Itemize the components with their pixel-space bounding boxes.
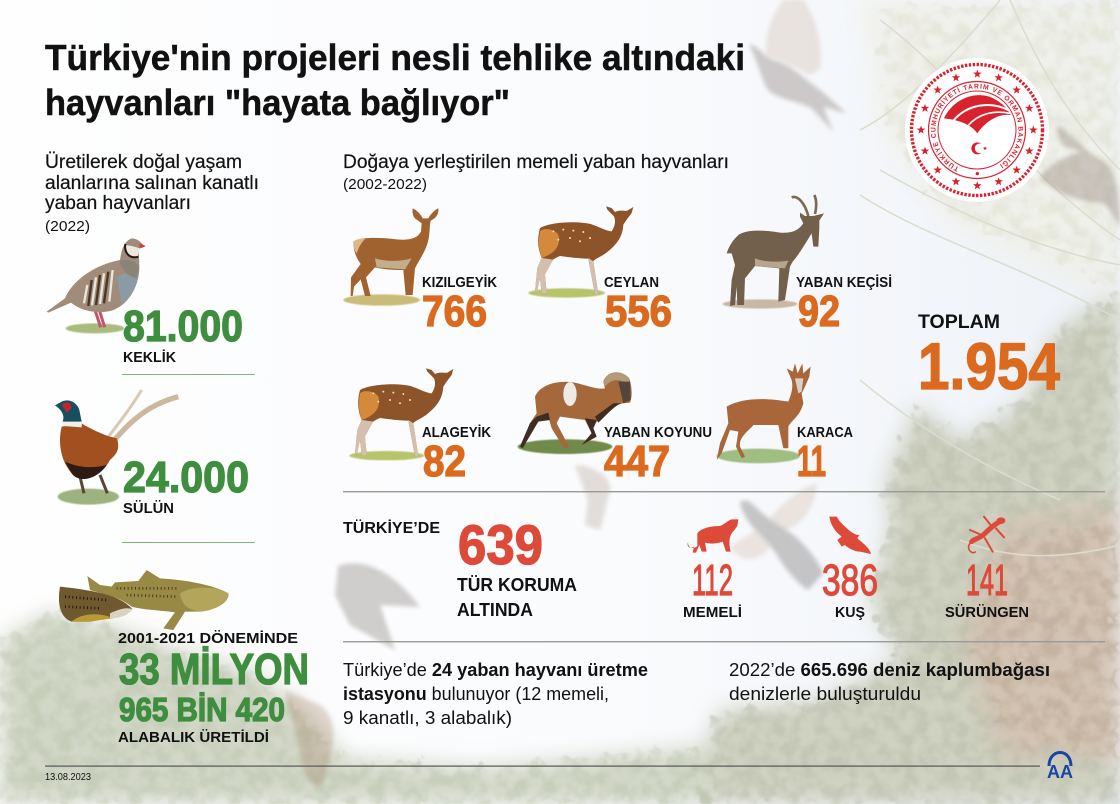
icon: lizard bbox=[969, 517, 1005, 553]
icon: wild goat bbox=[723, 195, 824, 309]
right heading: released mammals: Doğaya yerleştirilen memeli yaban hayvanları bbox=[343, 152, 729, 173]
number: 447 bbox=[604, 437, 670, 486]
number: 1.954 bbox=[918, 329, 1060, 403]
label: YABAN KOYUNU bbox=[604, 424, 712, 441]
label: KEKLİK bbox=[123, 349, 176, 366]
icon: fallow deer bbox=[349, 368, 453, 460]
panel: total bbox=[918, 311, 1060, 403]
number: 11 bbox=[797, 437, 826, 486]
number: 639 bbox=[458, 513, 543, 576]
flying birds (faint) bbox=[285, 0, 1120, 790]
left heading: released winged animals: Üretilerek doğal yaşam bbox=[45, 152, 242, 173]
ministry emblem bbox=[905, 58, 1049, 202]
text block: breeding stations bbox=[343, 659, 648, 728]
icon: pheasant bbox=[55, 390, 178, 505]
label: CEYLAN bbox=[604, 274, 659, 291]
left heading: released winged animals: (2022) bbox=[45, 218, 90, 235]
ministry emblem: TÜRKİYE CUMHURİYETİ TARIM VE ORMAN BAKANLIĞI bbox=[930, 84, 1024, 172]
number: 92 bbox=[798, 287, 840, 336]
panel: birds bbox=[822, 517, 878, 621]
label: KUŞ bbox=[835, 604, 865, 621]
label: KIZILGEYİK bbox=[422, 274, 497, 291]
icon: red deer bbox=[343, 208, 438, 306]
panel: mouflon bbox=[518, 372, 712, 486]
panel: fallow deer bbox=[349, 368, 491, 486]
label: YABAN KEÇİSİ bbox=[796, 274, 892, 291]
number: 386 bbox=[822, 556, 878, 605]
panel: protected species: ALTINDA bbox=[457, 600, 533, 620]
panel: roe deer bbox=[717, 363, 853, 486]
panel: mammals bbox=[683, 519, 742, 621]
label: TOPLAM bbox=[918, 311, 1000, 333]
panel: red deer bbox=[343, 208, 497, 336]
label: KARACA bbox=[797, 424, 853, 441]
label: ALAGEYİK bbox=[422, 424, 491, 441]
icon: partridge bbox=[47, 238, 146, 333]
right heading: released mammals: (2002-2022) bbox=[343, 176, 427, 193]
label: MEMELİ bbox=[683, 604, 742, 621]
right heading: released mammals bbox=[343, 152, 729, 193]
panel: wild goat bbox=[723, 195, 892, 336]
text block: sea turtles: 2022’de 665.696 deniz kaplumbağası bbox=[729, 659, 1050, 680]
panel: protected species bbox=[343, 513, 577, 620]
icon: panther bbox=[688, 519, 738, 553]
number: 141 bbox=[966, 556, 1008, 605]
title: hayvanları "hayata bağlıyor" bbox=[45, 82, 510, 123]
number: 766 bbox=[422, 287, 487, 336]
number: 24.000 bbox=[123, 453, 249, 502]
number: 965 thousand 420: 965 BİN 420 bbox=[119, 691, 285, 728]
label: TÜRKİYE’DE bbox=[343, 520, 440, 537]
panel: gazelle bbox=[528, 206, 672, 336]
left heading: released winged animals bbox=[45, 152, 259, 235]
footer rule and date: 13.08.2023 bbox=[45, 772, 91, 783]
label: SÜRÜNGEN bbox=[945, 604, 1029, 621]
number: 33 million: 33 MİLYON bbox=[119, 645, 309, 694]
left heading: released winged animals: yaban hayvanları bbox=[45, 193, 191, 214]
text block: sea turtles: denizlerle buluşturuldu bbox=[729, 683, 921, 704]
panel: reptiles bbox=[945, 517, 1029, 621]
text block: breeding stations: 9 kanatlı, 3 alabalık) bbox=[343, 707, 512, 728]
text block: breeding stations: Türkiye’de 24 yaban hayvanı üretme bbox=[343, 659, 648, 680]
period label: 2001-2021 DÖNEMİNDE bbox=[118, 630, 298, 647]
number: 82 bbox=[423, 437, 466, 486]
text block: sea turtles bbox=[729, 659, 1050, 704]
caption: TÜR KORUMA bbox=[457, 575, 577, 595]
title: Türkiye'nin projeleri nesli tehlike altındaki bbox=[45, 37, 745, 78]
number: 81.000 bbox=[123, 302, 243, 351]
caption: ALABALIK ÜRETİLDİ bbox=[118, 729, 269, 746]
text block: breeding stations: istasyonu bulunuyor (12 memeli, bbox=[343, 683, 609, 704]
icon: mouflon bbox=[518, 372, 632, 454]
panel: pheasant bbox=[55, 390, 249, 517]
title bbox=[45, 37, 745, 123]
number: 112 bbox=[692, 556, 733, 605]
agency logo: AA bbox=[1047, 762, 1073, 782]
agency logo bbox=[1047, 752, 1073, 782]
icon: roe deer bbox=[717, 363, 811, 463]
icon: trout bbox=[59, 570, 228, 630]
panel: trout bbox=[59, 570, 309, 746]
label: SÜLÜN bbox=[123, 500, 174, 517]
number: 556 bbox=[605, 287, 672, 336]
panel: partridge bbox=[47, 238, 243, 366]
icon: eagle bbox=[829, 517, 871, 554]
left heading: released winged animals: alanlarına salınan kanatlı bbox=[45, 173, 259, 194]
icon: gazelle bbox=[528, 206, 633, 298]
